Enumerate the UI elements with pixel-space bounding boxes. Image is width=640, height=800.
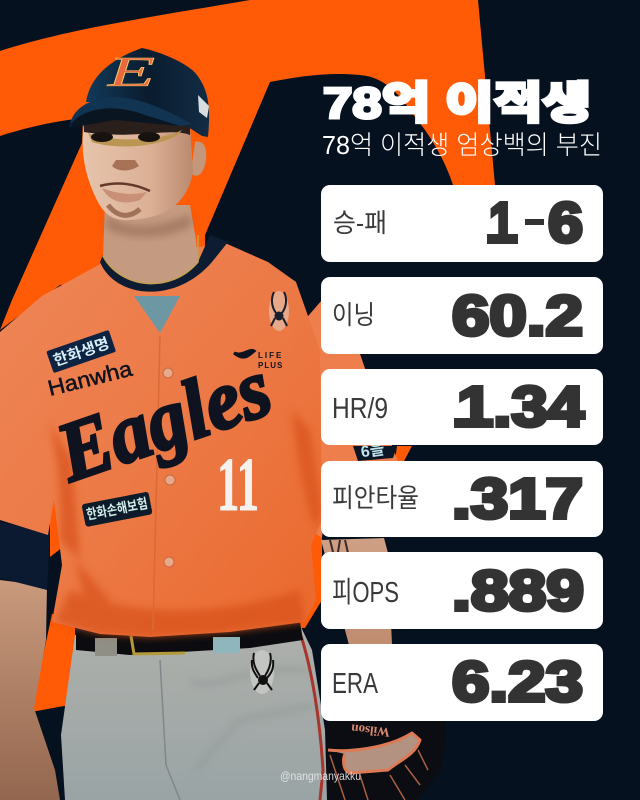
watermark: @nangmanyakku (280, 769, 361, 783)
icon: spider logo on pants (250, 650, 274, 694)
stat card: wins-losses (321, 185, 603, 262)
jersey (0, 235, 322, 637)
stat card: wins-losses: 6 (548, 191, 583, 255)
text: life plus logo (234, 350, 283, 370)
player photo illustration (0, 48, 446, 800)
text: number 11: 11 (217, 443, 259, 527)
text: life plus logo: LIFE (258, 351, 283, 360)
stat card: ERA (321, 644, 603, 721)
stat card: HR/9: 1.34 (457, 375, 584, 439)
title: 78억 이적생 (323, 79, 591, 128)
stat card: ERA: 6.23 (452, 650, 583, 714)
stat card: innings (321, 277, 603, 354)
right arm: 6을 (360, 440, 386, 461)
stat card: innings: 이닝 (332, 300, 375, 330)
pants (61, 622, 327, 800)
text: Eagles script: Eagles (45, 341, 282, 500)
stat card: OPS against: 피OPS (332, 577, 399, 609)
orange background stroke (0, 0, 495, 712)
face (83, 118, 193, 220)
stat card: wins-losses: 1 (489, 191, 515, 255)
glove (326, 721, 446, 800)
patch: sponsor hanwha life: 한화생명 (51, 335, 112, 370)
subtitle: 78억 이적생 엄상백의 부진 (322, 130, 602, 160)
ear (191, 142, 206, 176)
stat card: ERA: ERA (332, 668, 378, 700)
text: life plus logo: PLUS (258, 361, 283, 370)
stat card: HR/9: HR/9 (332, 393, 388, 425)
patch: sponsor hanwha insurance: 한화손해보험 (85, 495, 149, 523)
stat card: innings: 60.2 (452, 284, 583, 348)
stat card: batting average against: 피안타율 (332, 483, 419, 513)
buttons (163, 368, 175, 567)
neck (103, 205, 198, 284)
icon: spider logo on chest (269, 291, 289, 331)
icon: cap E logo: E (106, 50, 155, 96)
stat card: OPS against (321, 552, 603, 629)
stat card: batting average against: .317 (452, 467, 583, 531)
left arm (0, 522, 60, 800)
stat card: OPS against: .889 (452, 559, 584, 623)
stat card: batting average against (321, 461, 603, 537)
stat card: wins-losses: 승-패 (333, 208, 387, 238)
cap (70, 48, 209, 137)
right arm (296, 300, 398, 645)
patch: sponsor hanwha life (46, 330, 116, 373)
stat card: HR/9 (321, 369, 603, 445)
text: Hanwha: Hanwha (45, 356, 135, 401)
glove: Wilson (350, 721, 391, 740)
